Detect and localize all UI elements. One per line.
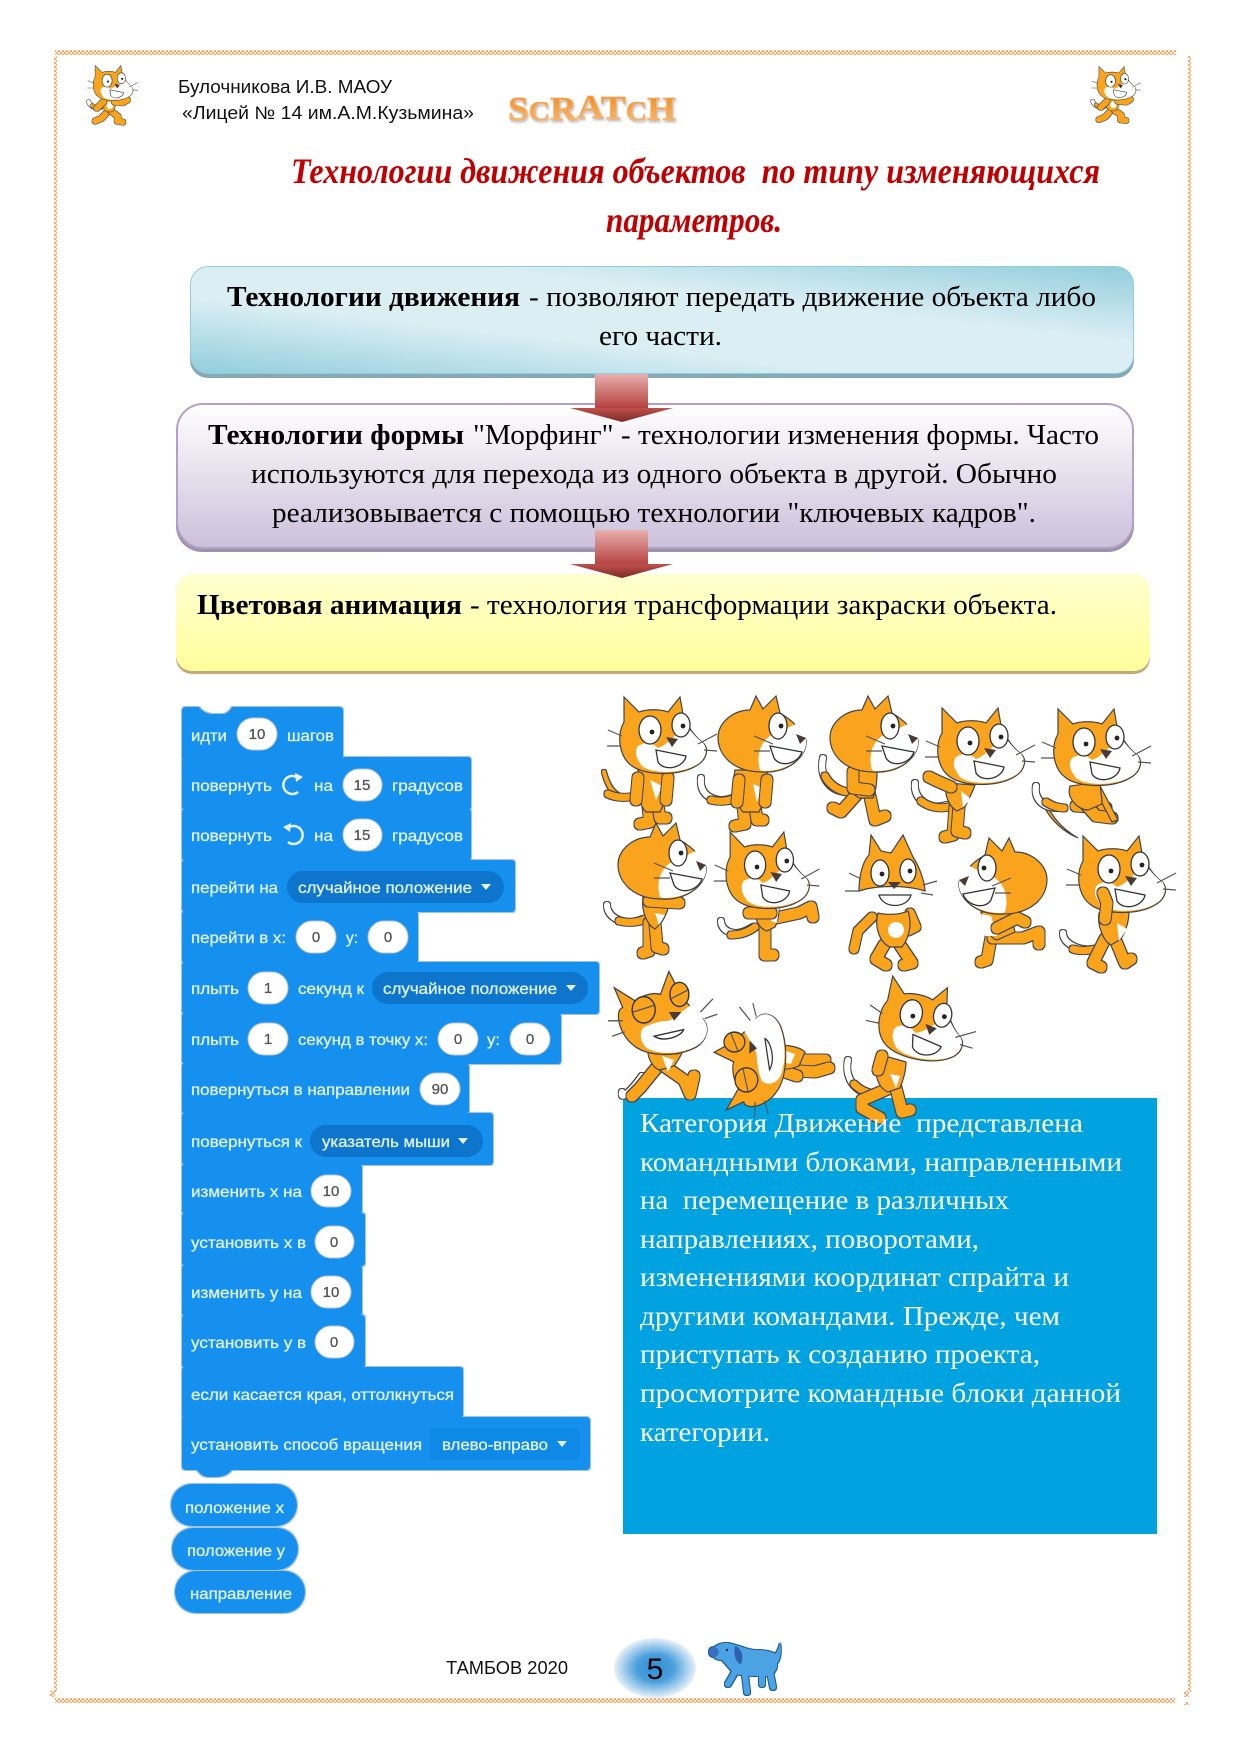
- block: glide to random position: секунд к: [298, 981, 365, 998]
- cat costume 6: [607, 823, 706, 953]
- block: point in direction: [182, 1063, 469, 1114]
- panel: shape technologies: [176, 404, 1134, 552]
- category description text: просмотрите командные блоки данной: [640, 1378, 1121, 1408]
- scratch logo: SCR: [508, 91, 575, 128]
- block: turn counterclockwise: градусов: [392, 828, 463, 845]
- block: change y: [182, 1265, 362, 1316]
- block: go to random position: случайное положение: [298, 880, 472, 897]
- cat costume 11 sleeping: [608, 971, 717, 1096]
- title: Технологии движения объектов по типу изменяющихся: [291, 151, 1100, 191]
- category description text: [640, 1108, 1122, 1447]
- block: set x: установить x в: [191, 1235, 306, 1252]
- scratch logo: H: [647, 91, 676, 128]
- block: point towards mouse: указатель мыши: [322, 1134, 450, 1151]
- block: glide to random position: случайное положение: [383, 981, 557, 998]
- scratch logo: A: [577, 89, 604, 126]
- block: set y: 0: [330, 1334, 338, 1351]
- block: glide to xy: [182, 1013, 561, 1064]
- category description text: на перемещение в различных: [640, 1185, 1010, 1215]
- cat costume 10: [1063, 836, 1176, 967]
- block: point in direction: 90: [432, 1081, 448, 1098]
- block: set y: установить y в: [191, 1335, 306, 1352]
- block: set y: [182, 1315, 365, 1368]
- title: [291, 151, 1100, 240]
- arrow: motion to shape: [570, 374, 673, 422]
- category description text: Категория Движение представлена: [640, 1108, 1083, 1138]
- block: go to xy: [182, 911, 418, 963]
- category description text: категории.: [640, 1417, 770, 1447]
- block: rotation style: [182, 1417, 590, 1477]
- category description text: другими командами. Прежде, чем: [640, 1301, 1060, 1331]
- panel: shape technologies: реализовывается с помощью технологии "ключевых кадров".: [272, 498, 1036, 529]
- block: go to xy: 0: [384, 929, 392, 946]
- block: glide to random position: [182, 962, 599, 1014]
- reporter: direction: направление: [190, 1586, 292, 1603]
- panel: shape technologies: используются для перехода из одного объекта в другой. Обычно: [251, 459, 1057, 490]
- block: bounce on edge: [182, 1367, 463, 1418]
- block: change y: изменить y на: [191, 1285, 302, 1302]
- author text: «Лицей № 14 им.А.М.Кузьмина»: [182, 103, 474, 123]
- cat costume 3: [822, 696, 918, 820]
- block: change x: изменить x на: [191, 1184, 302, 1201]
- panel: colour animation: Цветовая анимация: [197, 590, 462, 621]
- cat costume 5: [1036, 709, 1151, 838]
- block: turn counterclockwise: 15: [354, 827, 370, 844]
- cat costume 7: [714, 832, 819, 955]
- block: go to xy: 0: [312, 929, 320, 946]
- reporter blocks: [171, 1484, 305, 1613]
- category description text: командными блоками, направленными: [640, 1147, 1122, 1177]
- block: glide to xy: 0: [526, 1031, 534, 1048]
- block: go to random position: перейти на: [191, 880, 278, 897]
- block: turn counterclockwise: [182, 809, 471, 861]
- panel: motion technologies: его части.: [599, 321, 722, 352]
- panel: motion technologies: Технологии движения: [227, 282, 520, 313]
- icon: scratch cat left: [87, 65, 138, 122]
- author text: [178, 77, 474, 123]
- cat costume 9: [959, 838, 1047, 962]
- block: rotation style: установить способ вращения: [191, 1437, 422, 1454]
- block: move steps: 10: [249, 726, 265, 743]
- block: turn clockwise: [182, 757, 471, 810]
- icon: scratch cat right: [1091, 66, 1141, 121]
- panel: motion technologies: [190, 266, 1134, 378]
- block: glide to xy: 1: [264, 1031, 272, 1048]
- panel: colour animation: [176, 574, 1150, 674]
- scratch logo: [508, 89, 676, 128]
- block: change x: [182, 1164, 362, 1214]
- panel: colour animation: - технология трансформации закраски объекта.: [470, 590, 1057, 621]
- block: glide to random position: 1: [264, 980, 272, 997]
- block: glide to xy: 0: [454, 1031, 462, 1048]
- icon: blue dog: [709, 1643, 781, 1692]
- cat costume 13: [847, 972, 984, 1118]
- page number badge: 5: [647, 1653, 663, 1686]
- block: point in direction: повернуться в направлении: [191, 1082, 410, 1099]
- cat costume 8: [845, 835, 937, 965]
- block: bounce on edge: если касается края, оттолкнуться: [191, 1387, 454, 1404]
- block: turn clockwise: 15: [354, 777, 370, 794]
- panel: motion technologies: - позволяют передать движение объекта либо: [529, 282, 1096, 313]
- block: point towards mouse: [182, 1113, 493, 1165]
- scratch logo: T: [601, 90, 626, 127]
- scratch motion blocks: [182, 707, 599, 1477]
- sprite costumes: [604, 696, 1176, 1119]
- scratch logo: C: [626, 96, 647, 126]
- block: go to xy: перейти в x:: [191, 930, 286, 947]
- block: move steps: [182, 707, 343, 758]
- title: параметров.: [606, 200, 782, 240]
- cat costume 1: [604, 697, 717, 824]
- block: turn counterclockwise: на: [314, 828, 333, 845]
- panel: shape technologies: Технологии формы: [208, 420, 464, 451]
- block: go to random position: [182, 860, 515, 912]
- footer text: ТАМБОВ 2020: [446, 1658, 568, 1678]
- panel: shape technologies: "Морфинг" - технологии изменения формы. Часто: [473, 420, 1099, 451]
- block: set x: 0: [330, 1234, 338, 1251]
- cat costume 12 fallen: [712, 1002, 829, 1119]
- reporter: position y: положение y: [187, 1543, 285, 1560]
- block: turn clockwise: градусов: [392, 778, 463, 795]
- block: glide to xy: y:: [487, 1032, 500, 1049]
- block: point towards mouse: повернуться к: [191, 1134, 303, 1151]
- block: change x: 10: [323, 1183, 339, 1200]
- author text: Булочникова И.В. МАОУ: [178, 77, 393, 97]
- arrow: shape to colour: [570, 530, 673, 578]
- block: glide to xy: секунд в точку x:: [298, 1032, 428, 1049]
- block: rotation style: влево-вправо: [442, 1437, 548, 1454]
- block: glide to random position: плыть: [191, 981, 239, 998]
- category description text: приступать к созданию проекта,: [640, 1339, 1040, 1369]
- block: turn counterclockwise: повернуть: [191, 828, 272, 845]
- block: go to xy: y:: [346, 930, 358, 947]
- block: move steps: шагов: [287, 728, 334, 745]
- block: set x: [182, 1213, 365, 1266]
- block: glide to xy: плыть: [191, 1032, 239, 1049]
- cat costume 4: [915, 708, 1035, 837]
- page number badge: [614, 1638, 696, 1698]
- block: turn clockwise: на: [314, 778, 333, 795]
- block: change y: 10: [323, 1284, 339, 1301]
- block: turn clockwise: повернуть: [191, 778, 272, 795]
- block: move steps: идти: [191, 728, 227, 745]
- category description text: направлениях, поворотами,: [640, 1224, 979, 1254]
- cat costume 2: [701, 696, 806, 826]
- category description text: изменениями координат спрайта и: [640, 1262, 1069, 1292]
- reporter: position x: положение x: [185, 1500, 284, 1517]
- panel: category description background: [623, 1098, 1157, 1534]
